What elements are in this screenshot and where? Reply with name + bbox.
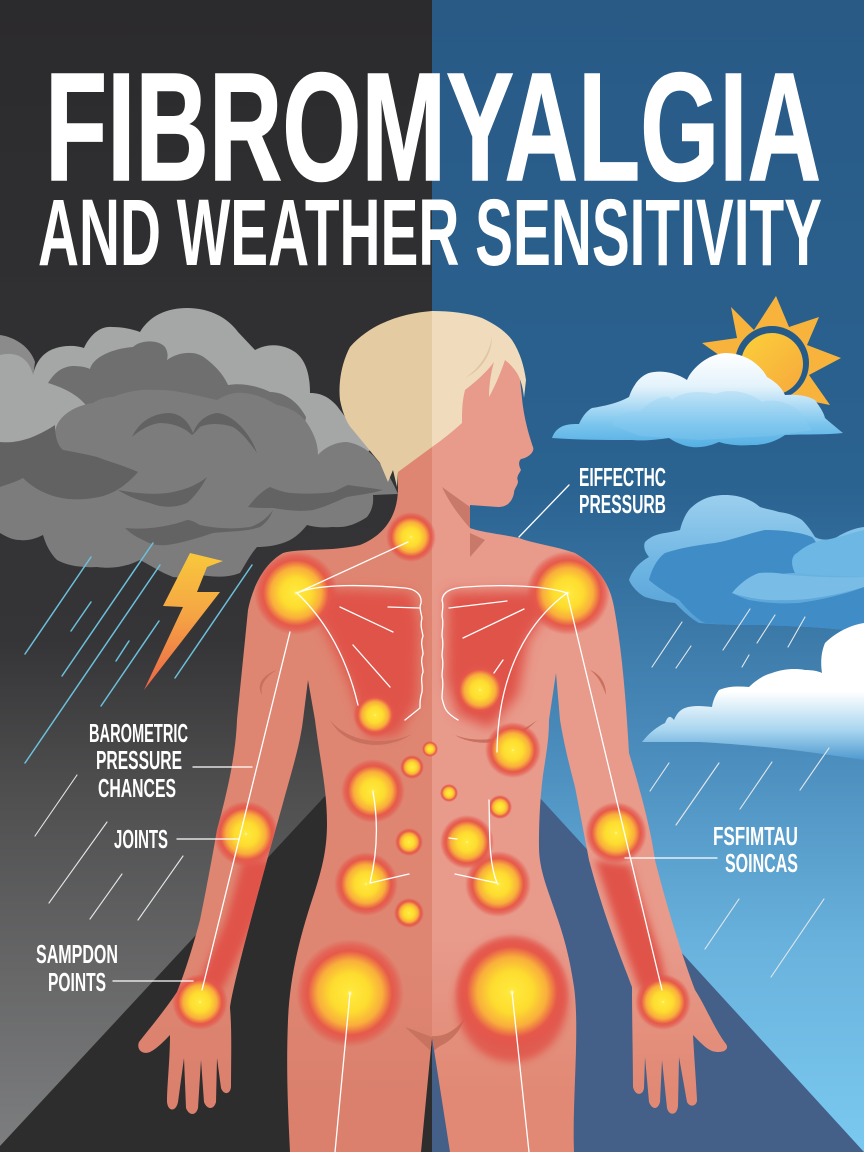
shadow: chest and arm creases: [260, 670, 606, 745]
label: fsfimtau soincas: SOINCAS: [725, 848, 798, 878]
storm cloud: [0, 308, 398, 578]
background: dark triangle lower left: [0, 795, 432, 1152]
label: fsfimtau soincas: [625, 821, 798, 878]
rain left: white streaks: [35, 775, 183, 920]
label: effective pressure: [519, 462, 666, 537]
label: sampdon points: POINTS: [48, 967, 106, 997]
label: barometric pressure changes: BAROMETRIC: [89, 718, 188, 748]
shadow: neck folds: [442, 487, 485, 557]
shadow: hip crease: [406, 1021, 464, 1051]
pain point glows: [172, 512, 691, 1062]
label: sampdon points: SAMPDON: [36, 939, 118, 969]
label: barometric pressure changes: [89, 718, 252, 803]
label: effective pressure: EIFFECTHC: [579, 462, 666, 492]
body silhouette: [138, 360, 727, 1152]
background: blue sky right half: [432, 0, 864, 1152]
background: dark stormy left half: [0, 0, 432, 1152]
hair: [339, 311, 526, 487]
title: [38, 41, 822, 286]
icon: sun: [702, 296, 841, 405]
muscle: right back: [446, 590, 562, 728]
label: barometric pressure changes: CHANCES: [98, 773, 176, 803]
rain left: blue streaks: [25, 543, 252, 763]
muscle: left forearm: [198, 860, 277, 990]
nerve lines: [202, 542, 662, 1152]
label: effective pressure: PRESSURB: [579, 489, 666, 519]
label: fsfimtau soincas: FSFIMTAU: [713, 821, 798, 851]
muscle: right forearm: [595, 860, 668, 990]
label: joints: JOINTS: [114, 824, 168, 854]
cloud: mid-blue rain cloud: [629, 495, 864, 632]
rain right: white streaks: [650, 609, 829, 977]
cloud: white sunlit cloud: [552, 353, 843, 447]
background: grey diagonal panel lower left: [0, 640, 340, 1148]
label: barometric pressure changes: PRESSURE: [96, 745, 182, 775]
cloud: bright white cloud: [642, 623, 864, 760]
background: navy triangle lower right: [432, 798, 864, 1152]
label: sampdon points: [36, 939, 193, 997]
muscle: left back: [300, 588, 420, 738]
icon: lightning bolt: [144, 553, 223, 690]
figure: human body with pain points: [120, 300, 752, 1152]
